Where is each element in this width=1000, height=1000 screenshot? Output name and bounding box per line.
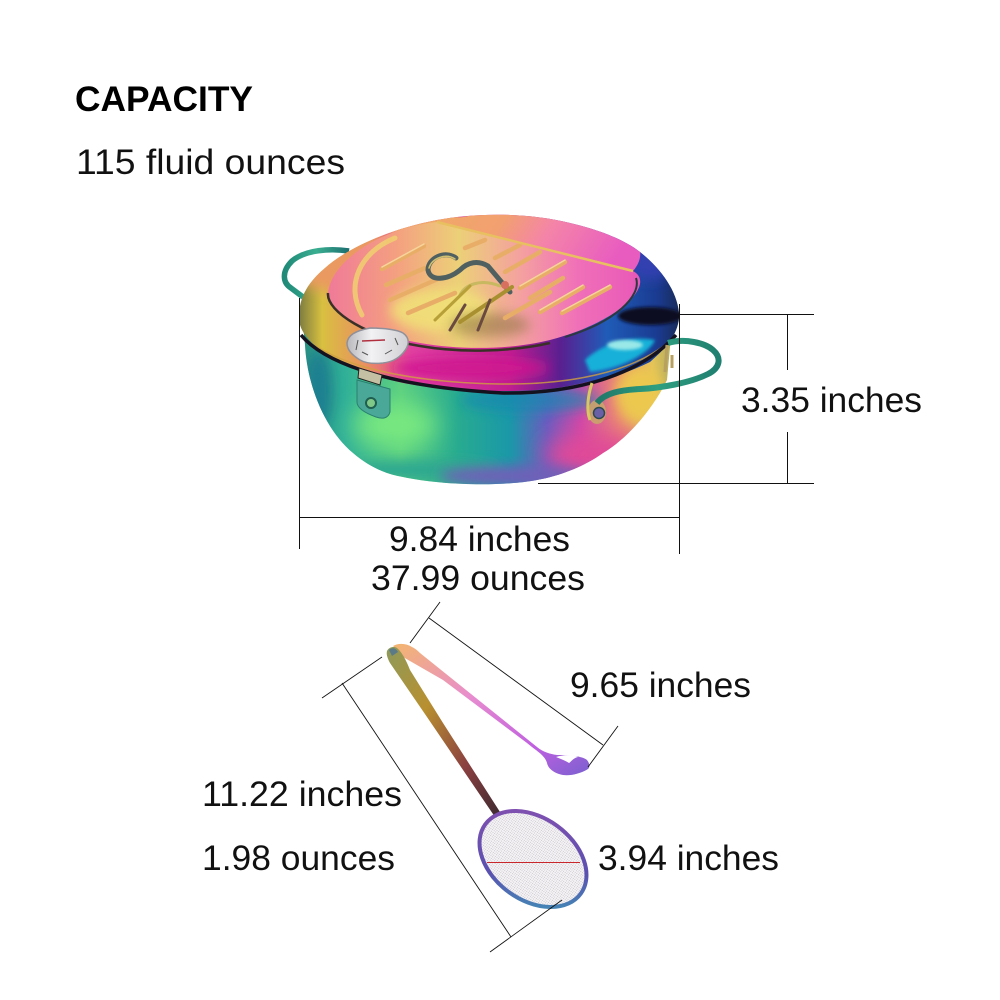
lid plate	[328, 222, 640, 351]
title: CAPACITY	[75, 80, 253, 119]
lid knob wire	[428, 255, 512, 330]
right handle mount	[665, 345, 672, 372]
thermometer	[347, 328, 408, 363]
capacity value: 115 fluid ounces	[76, 143, 345, 182]
side rivet	[588, 383, 606, 424]
skimmer diameter label: 3.94 inches	[598, 839, 779, 878]
left handle	[284, 250, 349, 297]
skimmer diameter line	[487, 862, 580, 864]
pot weight label: 37.99 ounces	[371, 559, 585, 598]
dimension lines: tools	[322, 602, 618, 952]
pot rim seam	[301, 335, 676, 393]
tool: perforated spoon	[393, 644, 589, 775]
lid clasp	[357, 368, 390, 418]
spoon length label: 9.65 inches	[570, 666, 751, 705]
right handle	[597, 341, 719, 403]
pot body	[300, 325, 675, 490]
skimmer weight label: 1.98 ounces	[202, 839, 395, 878]
skimmer length label: 11.22 inches	[202, 775, 402, 814]
frying pot illustration	[284, 205, 719, 490]
pot height label: 3.35 inches	[741, 381, 922, 420]
lid dome	[300, 214, 679, 391]
pot width label: 9.84 inches	[389, 520, 570, 559]
dimension lines: pot	[299, 298, 814, 554]
tool: mesh skimmer	[387, 647, 605, 927]
